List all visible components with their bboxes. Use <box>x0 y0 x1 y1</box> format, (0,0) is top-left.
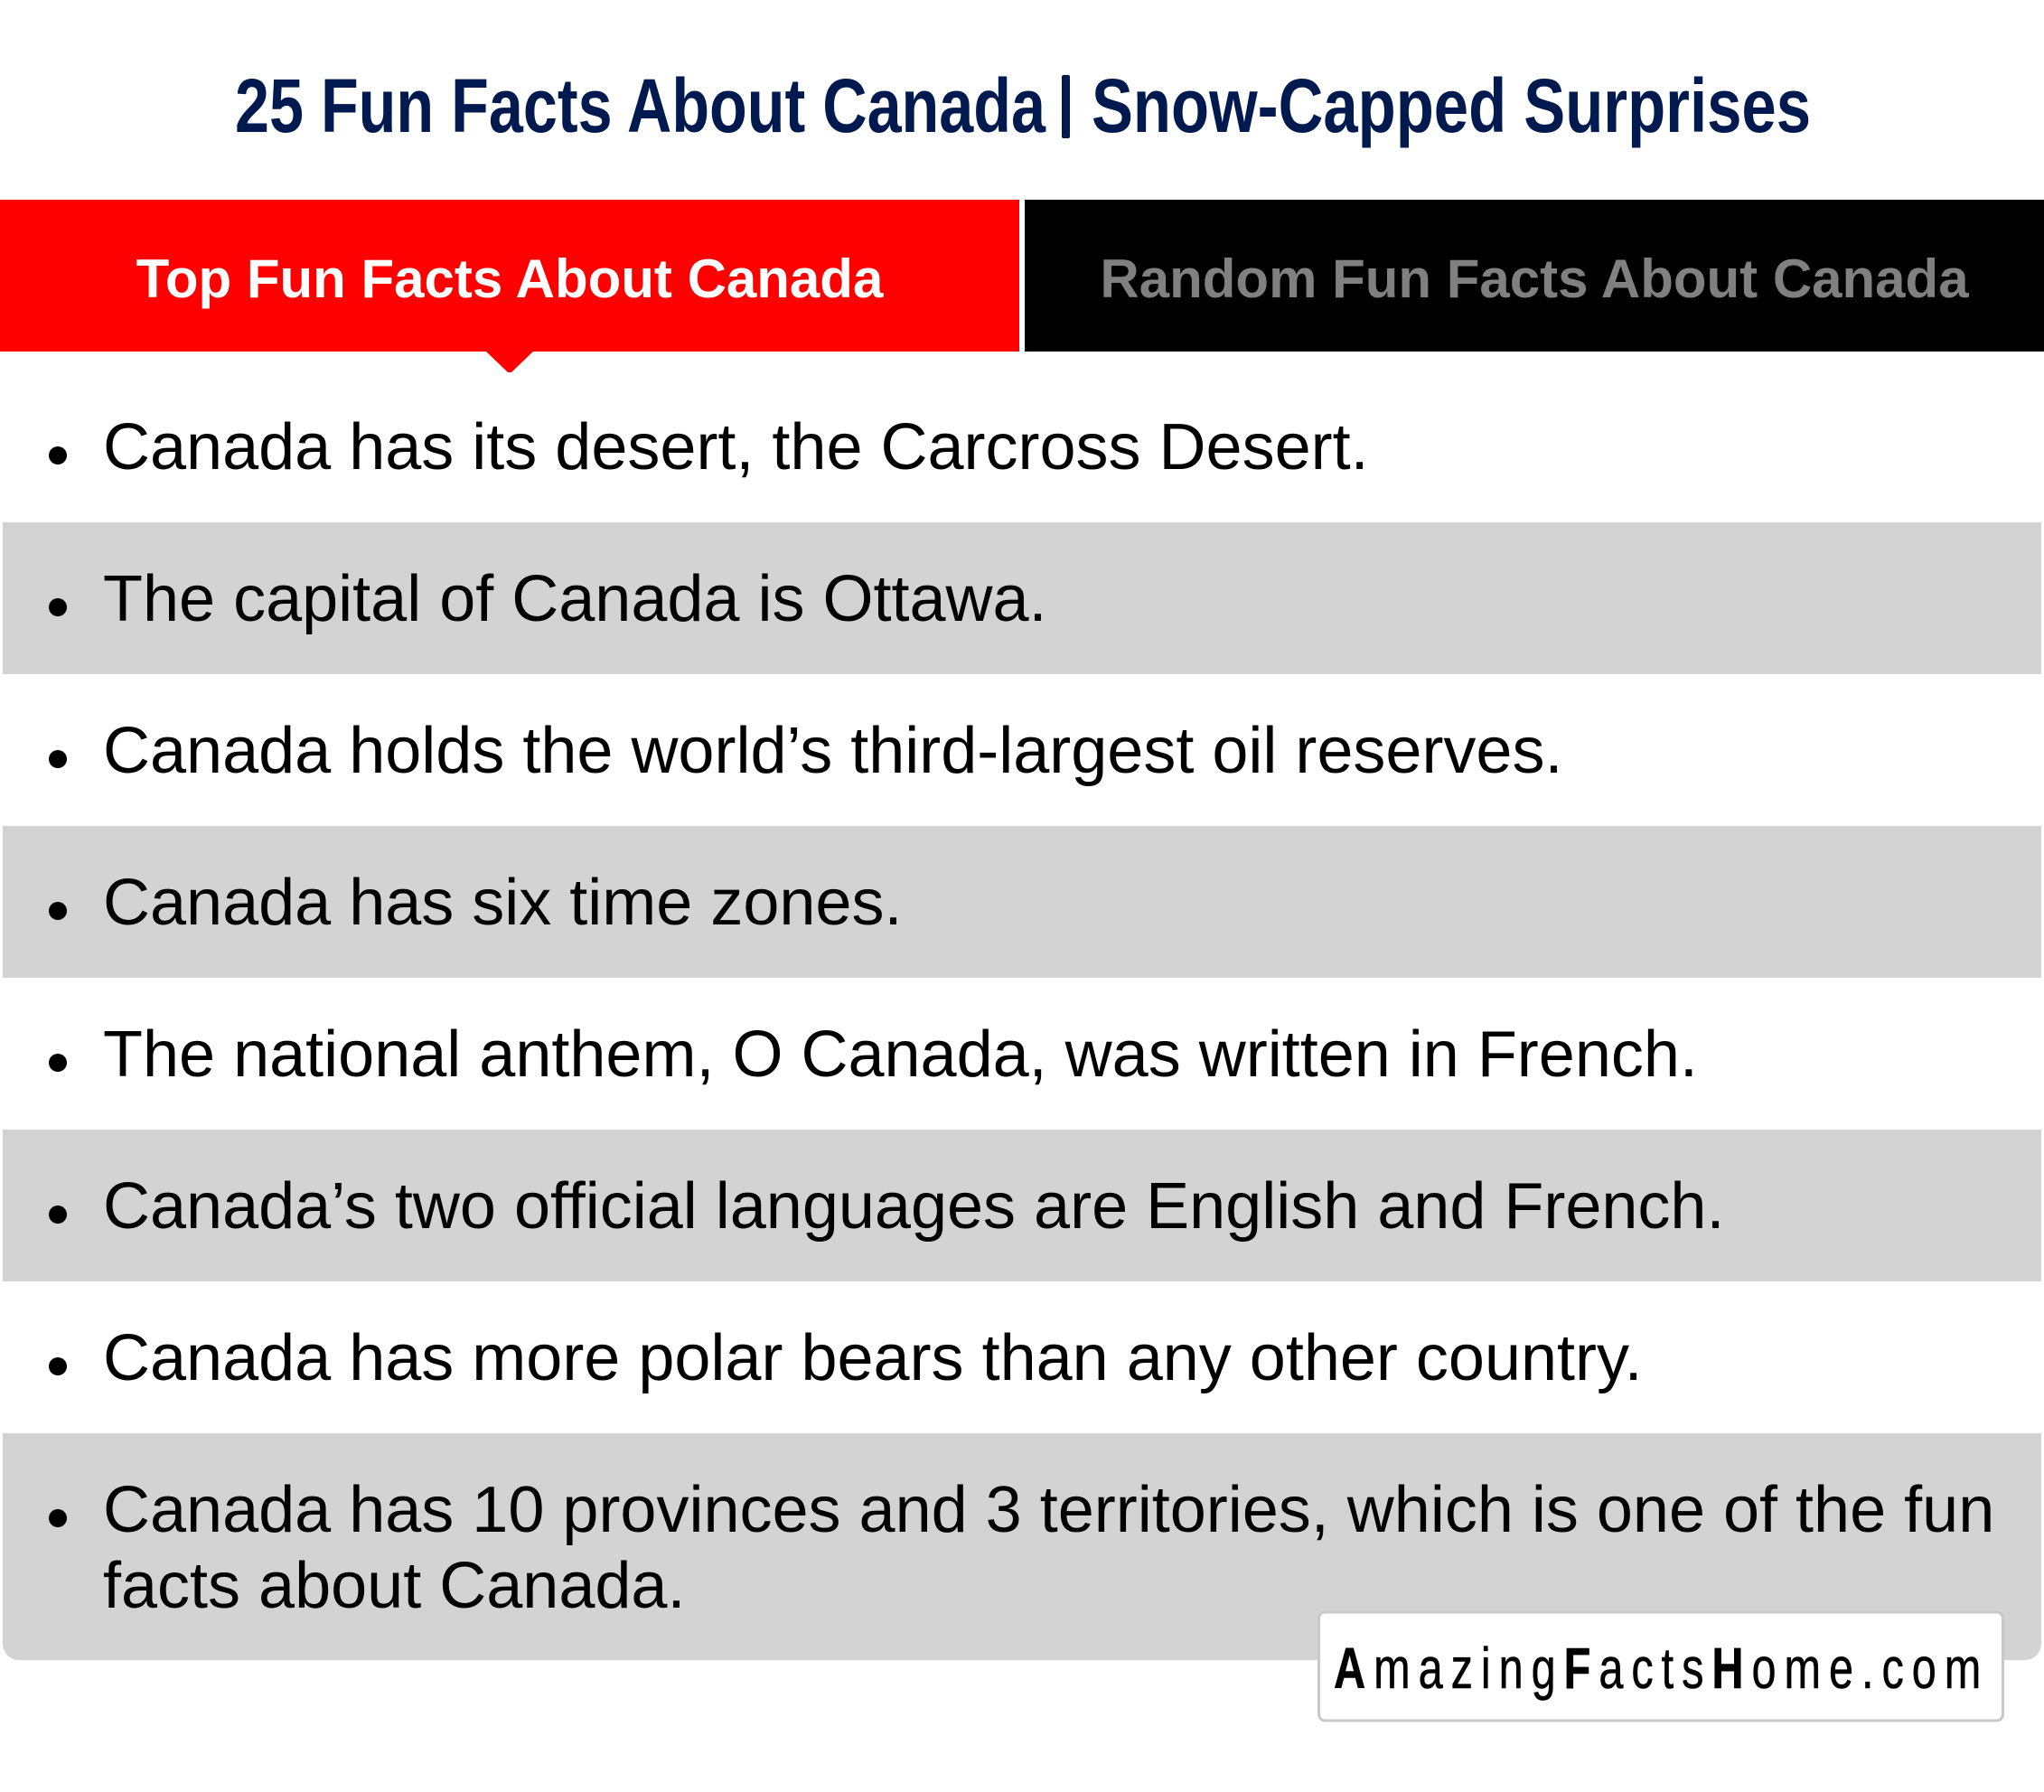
title <box>235 63 1811 148</box>
title: Snow-Capped Surprises <box>1092 63 1811 148</box>
tab: top fun facts (active): Top Fun Facts About Canada <box>136 249 884 309</box>
fact row 6 <box>3 1130 2041 1281</box>
fact row 2: The capital of Canada is Ottawa. <box>103 563 1047 635</box>
watermark badge <box>1319 1612 2002 1721</box>
tab: random fun facts (inactive): Random Fun Facts About Canada <box>1100 249 1969 309</box>
fact row 8 <box>3 1433 2041 1660</box>
tab: random fun facts (inactive) <box>1025 200 2044 352</box>
fact row 4 <box>3 826 2041 978</box>
fact row 5: The national anthem, O Canada, was written in French. <box>103 1018 1698 1091</box>
fact row 1: Canada has its desert, the Carcross Desert. <box>103 411 1369 483</box>
fact row 6: Canada’s two official languages are English and French. <box>103 1170 1724 1243</box>
fact row 2 <box>3 522 2041 674</box>
fact row 8: facts about Canada. <box>103 1550 685 1622</box>
fact row 3: Canada holds the world’s third-largest oil reserves. <box>103 715 1562 787</box>
fact row 4: Canada has six time zones. <box>103 867 902 939</box>
watermark badge: AmazingFactsHome.com <box>1334 1637 1989 1702</box>
fact row 8: Canada has 10 provinces and 3 territories, which is one of the fun <box>103 1474 1994 1546</box>
title: 25 Fun Facts About Canada <box>235 63 1046 148</box>
tab: top fun facts (active) <box>0 200 1019 372</box>
fact row 7: Canada has more polar bears than any other country. <box>103 1322 1643 1394</box>
